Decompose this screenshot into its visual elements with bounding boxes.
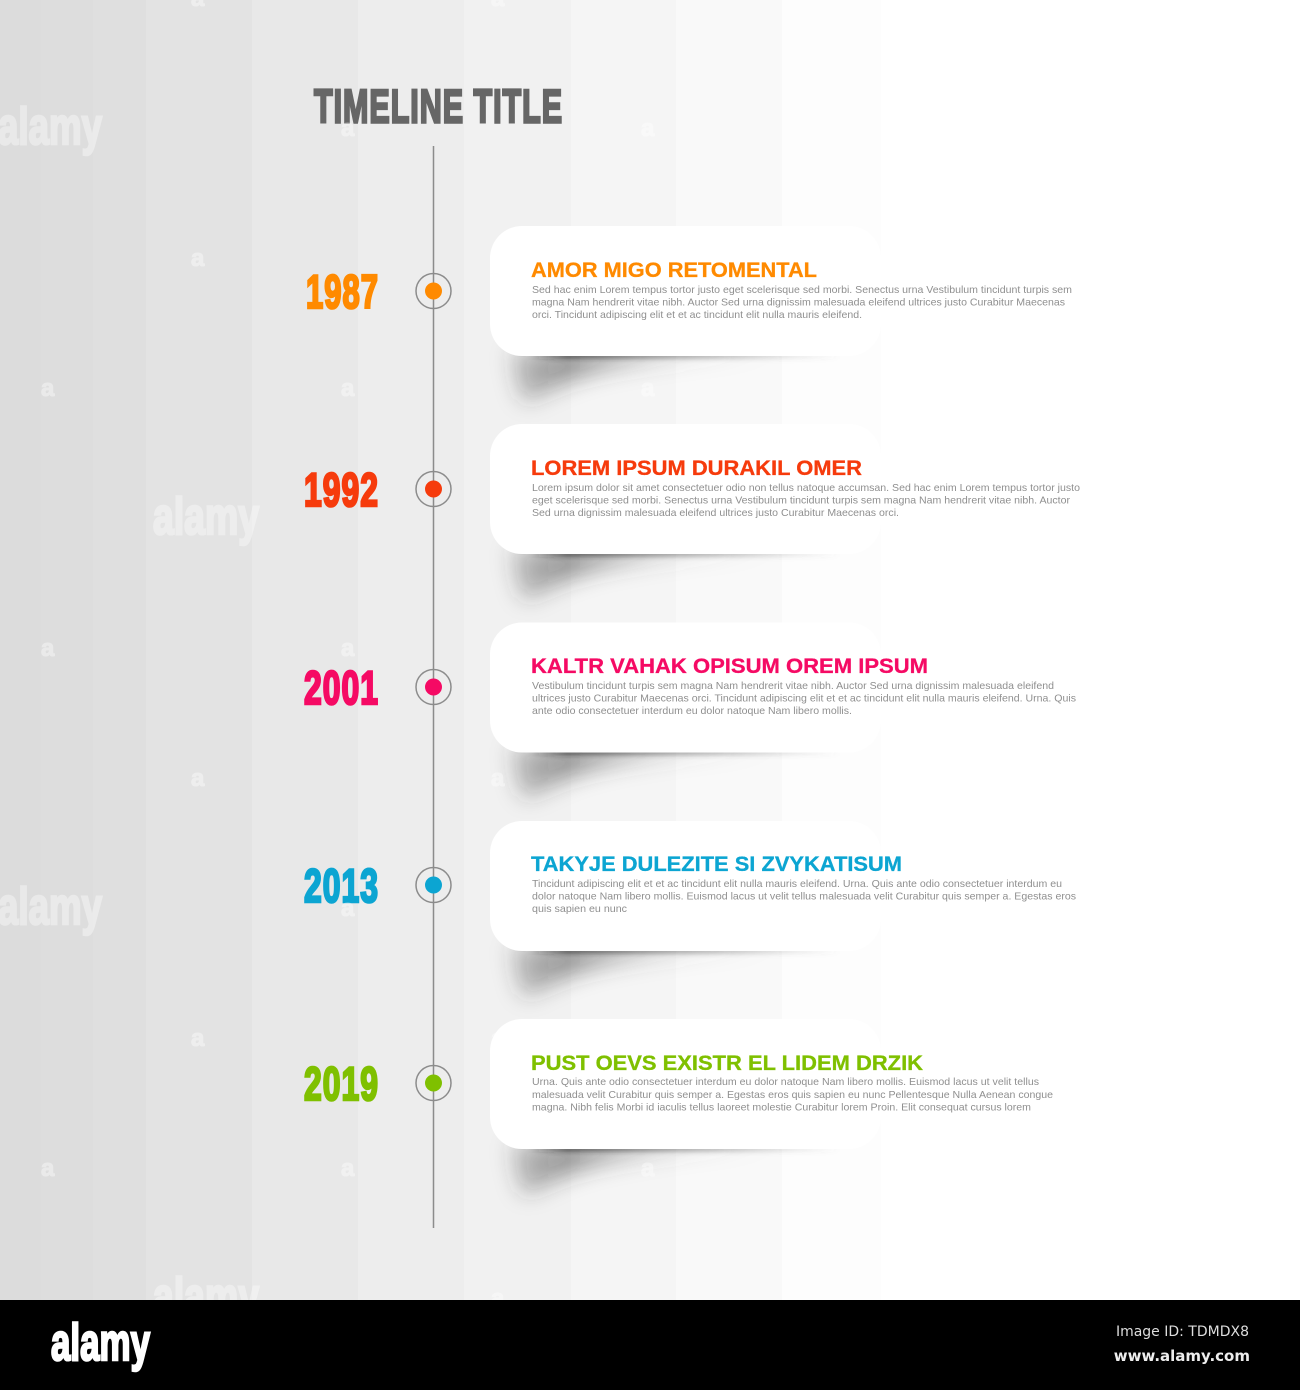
body 2019: Urna. Quis ante odio consectetuer interdum eu dolor natoque Nam libero mollis. Euismod lacus ut velit tellus [532,1076,1039,1088]
body 1987: orci. Tincidunt adipiscing elit et et ac tincidunt elit nulla mauris eleifend. [532,309,862,321]
watermarks [0,0,655,1326]
watermarks: a [341,895,355,922]
heading 1987: AMOR MIGO RETOMENTAL [531,259,817,282]
watermarks: alamy [153,1268,259,1326]
shadow 2013 [512,945,840,997]
shadow 1992 [512,548,840,600]
year 2013: 2013 [304,859,379,912]
watermarks: a [641,1155,655,1182]
shadow 2001 [512,746,840,798]
watermarks: a [191,1025,205,1052]
watermarks: a [491,1285,505,1312]
body 2001: ultrices justo Curabitur Maecenas orci. Tincidunt adipiscing elit et et ac tincidunt elit nulla mauris eleifend. Urna. Quis [532,692,1076,704]
watermarks: a [491,1025,505,1052]
timeline item 2001 [304,622,1076,798]
watermarks: alamy [0,878,102,936]
heading 1992: LOREM IPSUM DURAKIL OMER [531,457,862,480]
watermarks: a [491,505,505,532]
body 1992: eget scelerisque sed morbi. Senectus urna Vestibulum tincidunt turpis sem magna Nam hendrerit vitae nibh. Auctor [532,494,1070,506]
watermarks: a [41,375,55,402]
year 1992: 1992 [304,463,379,516]
card 2019 [490,1019,881,1149]
body 1992: Lorem ipsum dolor sit amet consectetuer odio non tellus natoque accumsan. Sed hac enim Lorem tempus tortor justo [532,482,1080,494]
timeline item 2019 [304,1019,1053,1195]
timeline axis line [432,146,434,1228]
timeline item 1992 [304,424,1080,600]
watermarks: a [641,115,655,142]
watermarks: a [41,1155,55,1182]
watermarks: a [341,115,355,142]
shadow 1987 [512,350,840,402]
marker 2013 [416,868,451,902]
timeline item 1987 [306,226,1072,402]
watermarks: alamy [0,98,102,156]
heading 2013: TAKYJE DULEZITE SI ZVYKATISUM [531,853,902,876]
timeline item 2013 [304,821,1076,997]
watermarks: a [641,895,655,922]
watermarks: a [641,375,655,402]
footer bar [0,1300,1300,1390]
marker 1992 [416,472,451,506]
body 2019: magna. Nibh felis Morbi id iaculis tellus laoreet molestie Curabitur lorem Proin. Elit consequat cursus lorem [532,1102,1031,1114]
body 2013: Tincidunt adipiscing elit et et ac tincidunt elit nulla mauris eleifend. Urna. Quis ante odio consectetuer interdum eu [532,878,1062,890]
title: TIMELINE TITLE [314,80,563,132]
footer logo: alamy [51,1314,150,1372]
year 1987: 1987 [306,265,379,318]
website: www.alamy.com [1114,1347,1250,1365]
body 2013: quis sapien eu nunc [532,903,627,915]
body 1992 [532,482,1080,519]
body 2019: malesuada velit Curabitur quis semper a. Egestas eros quis sapien eu nunc Pellentesque Nulla Aenean congue [532,1089,1053,1101]
image id: Image ID: TDMDX8 [1116,1324,1249,1340]
body 1987: magna Nam hendrerit vitae nibh. Auctor Sed urna dignissim malesuada eleifend ultrices justo Curabitur Maecenas [532,296,1065,308]
watermarks: a [341,635,355,662]
body 2001: Vestibulum tincidunt turpis sem magna Nam hendrerit vitae nibh. Auctor Sed urna dignissim malesuada eleifend [532,680,1054,692]
card 2013 [490,821,881,951]
watermarks: a [41,635,55,662]
body 2001: ante odio consectetuer interdum eu dolor natoque Nam libero mollis. [532,705,852,717]
watermarks: a [341,1155,355,1182]
body 2001 [532,680,1076,717]
heading 2001: KALTR VAHAK OPISUM OREM IPSUM [531,655,928,678]
marker 2001 [416,670,451,704]
body 1992: Sed urna dignissim malesuada eleifend ultrices justo Curabitur Maecenas orci. [532,507,899,519]
body 1987 [532,284,1072,321]
watermarks: a [191,245,205,272]
year 2019: 2019 [304,1057,379,1110]
shadow 2019 [512,1143,840,1195]
watermarks: alamy [153,488,259,546]
body 1987: Sed hac enim Lorem tempus tortor justo eget scelerisque sed morbi. Senectus urna Vestibulum tincidunt turpis sem [532,284,1072,296]
card 2001 [490,622,881,752]
body 2019 [532,1076,1053,1114]
body 2013: dolor natoque Nam libero mollis. Euismod lacus ut velit tellus malesuada velit Curabitur quis semper a. Egestas eros [532,890,1076,902]
watermarks: a [191,765,205,792]
marker 1987 [416,274,451,308]
body 2013 [532,878,1076,915]
marker 2019 [416,1066,451,1100]
watermarks: a [491,765,505,792]
year 2001: 2001 [304,661,379,714]
watermarks: a [491,245,505,272]
watermarks: a [341,375,355,402]
card 1987 [490,226,881,356]
card 1992 [490,424,881,554]
watermarks: a [641,635,655,662]
heading 2019: PUST OEVS EXISTR EL LIDEM DRZIK [531,1052,923,1075]
